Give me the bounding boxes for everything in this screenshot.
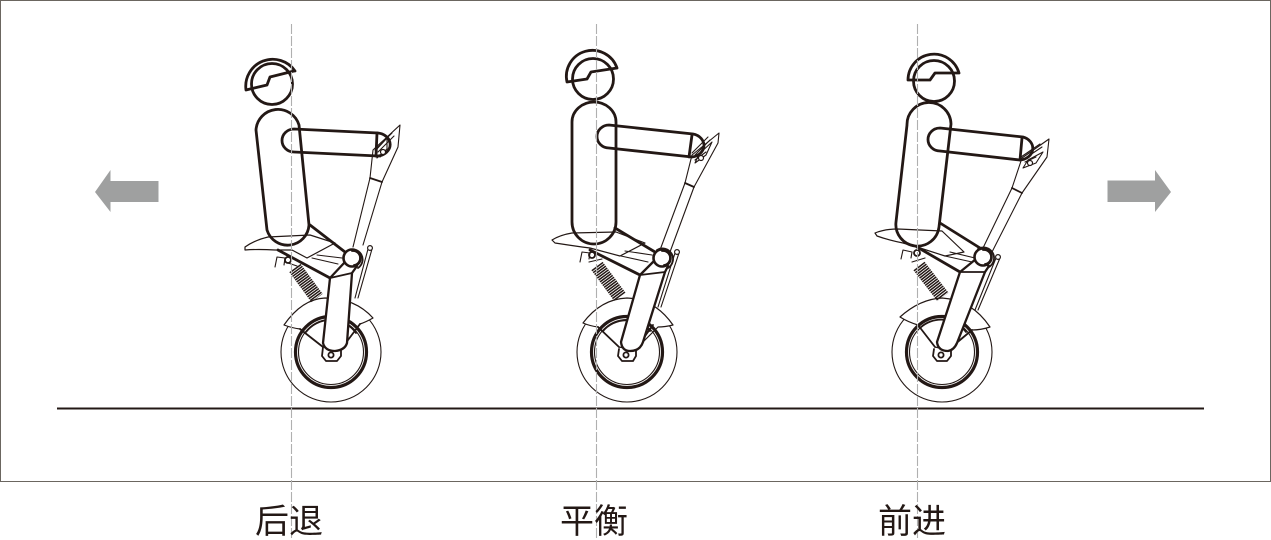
rider arm	[597, 125, 710, 160]
rider body	[256, 109, 309, 245]
steering pole and handle	[983, 139, 1049, 252]
steering pole and handle	[660, 133, 719, 252]
pivot joint	[344, 249, 363, 268]
shock absorber	[580, 252, 620, 297]
pivot joint	[654, 248, 673, 268]
support rod	[658, 250, 679, 307]
rider body	[896, 102, 951, 246]
wheel	[281, 298, 381, 402]
shock absorber	[275, 257, 317, 298]
suspension arm	[323, 262, 357, 351]
rider head and helmet	[246, 59, 295, 104]
dashed centre lines	[292, 24, 918, 540]
rider head and helmet	[566, 50, 617, 100]
seat and chassis	[552, 228, 655, 275]
label: backward: 后退	[255, 503, 323, 540]
shock absorber	[901, 250, 943, 297]
rider body	[572, 102, 616, 244]
wheel	[892, 298, 992, 402]
seat and chassis	[875, 223, 980, 272]
figure: leaning backward	[245, 59, 400, 402]
seat and chassis	[245, 225, 345, 278]
steering pole and handle	[353, 125, 400, 247]
pivot joint	[974, 247, 994, 267]
support rod	[975, 255, 1000, 310]
arrow: backward	[95, 170, 158, 212]
wheel	[577, 298, 677, 402]
suspension arm	[937, 259, 989, 351]
figure: leaning forward	[875, 54, 1049, 402]
label: forward: 前进	[878, 503, 946, 540]
rider arm	[282, 129, 394, 157]
figure: balanced	[552, 50, 719, 402]
arrow: forward	[1108, 170, 1171, 212]
ground line	[57, 408, 1204, 410]
label: balance: 平衡	[560, 503, 628, 540]
rider head and helmet	[908, 54, 959, 102]
rider arm	[928, 128, 1042, 166]
support rod	[355, 246, 372, 298]
suspension arm	[621, 260, 668, 351]
